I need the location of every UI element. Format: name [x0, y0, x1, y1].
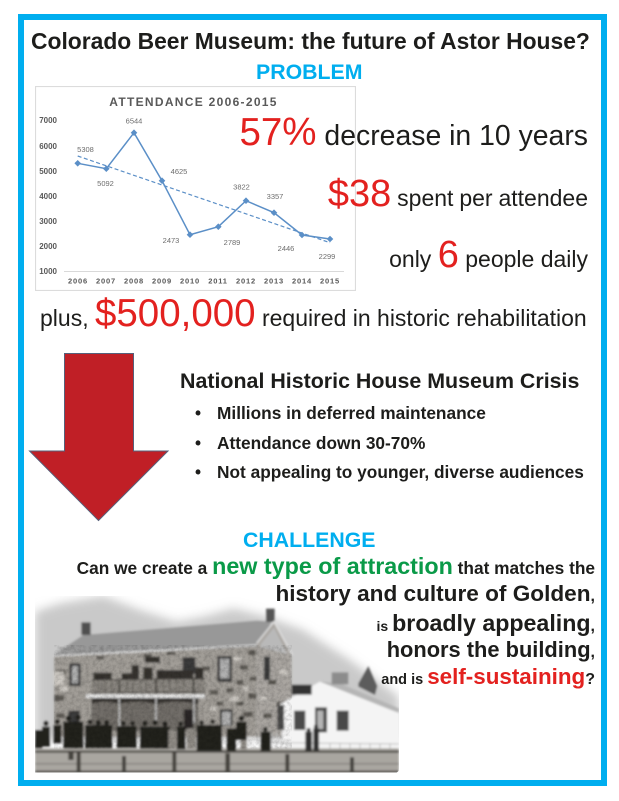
bullet 1: • [195, 403, 201, 423]
eaves [53, 645, 257, 656]
stat: $38 per attendee: $38 spent per attendee [328, 173, 588, 215]
x axis labels: 2008 [124, 276, 144, 286]
x axis labels: 2015 [320, 276, 340, 286]
y axis labels: 7000 [39, 116, 58, 125]
heading: problem: PROBLEM [256, 60, 362, 84]
x axis labels: 2012 [236, 276, 256, 286]
foreground rails and posts [35, 751, 399, 773]
line 2: history and culture of Golden, [275, 581, 595, 606]
heading: challenge: CHALLENGE [243, 528, 376, 552]
crowd [35, 715, 271, 751]
y axis labels: 4000 [39, 192, 58, 201]
line 1: Can we create a new type of attraction that matches the [77, 553, 595, 579]
windows [68, 656, 270, 726]
line 4: honors the building, [387, 637, 595, 662]
hills [35, 596, 399, 740]
data labels: 4625 [171, 167, 187, 176]
white cottage [280, 682, 399, 753]
trend line [78, 156, 330, 243]
x axis labels: 2011 [208, 276, 228, 286]
challenge question text [77, 553, 595, 689]
chimneys [81, 622, 91, 635]
bullet list: crisis points: Not appealing to younger, diverse audiences [217, 462, 584, 482]
cottage figures [305, 725, 319, 752]
bullet list: crisis points: Millions in deferred maintenance [217, 403, 486, 423]
y axis labels: 6000 [39, 142, 58, 151]
y axis labels [39, 116, 58, 276]
balcony railing [92, 679, 205, 693]
film grain on hotel [54, 645, 292, 748]
data labels: 3822 [233, 182, 250, 192]
line 5: and is self-sustaining? [381, 664, 595, 689]
y axis labels: 2000 [39, 242, 58, 251]
x axis line [64, 270, 344, 272]
hotel roof [53, 621, 272, 655]
data labels: 5092 [97, 179, 114, 188]
hotel facade [54, 647, 257, 737]
x axis labels [68, 276, 340, 286]
x axis labels: 2014 [292, 276, 312, 286]
bullet 3: • [195, 462, 201, 482]
bullet list: crisis points: Attendance down 30-70% [217, 433, 425, 453]
bullet 3 [195, 462, 584, 482]
bullet 2: • [195, 433, 201, 453]
balcony crowd [93, 657, 203, 681]
line chart: attendance 2006-2015 [35, 86, 356, 291]
x axis labels: 2013 [264, 276, 284, 286]
bullet 2 [195, 433, 425, 453]
x axis labels: 2006 [68, 276, 88, 286]
data labels: 2789 [224, 238, 240, 247]
y axis labels: 5000 [39, 167, 58, 176]
porch shade [92, 697, 198, 731]
stat: $500,000 rehabilitation: plus, $500,000 required in historic rehabilitation [40, 292, 587, 335]
y axis labels: 3000 [39, 217, 58, 226]
photo: historic Astor House [35, 596, 399, 772]
stone blocks [54, 650, 284, 718]
data labels: 2446 [278, 244, 294, 253]
street and foreground fence [35, 748, 399, 773]
heading: national crisis: National Historic House Museum Crisis [180, 369, 579, 393]
line 3: is broadly appealing, [377, 610, 595, 636]
y axis labels: 1000 [39, 267, 58, 276]
side wall and gable [257, 622, 292, 737]
picket fence [269, 734, 399, 748]
data labels [77, 116, 335, 261]
x axis labels: 2009 [152, 276, 172, 286]
data labels: 6544 [126, 116, 142, 126]
attendance series line [78, 133, 330, 239]
x axis labels: 2010 [180, 276, 200, 286]
stat: 57% decrease: 57% decrease in 10 years [239, 111, 588, 154]
stat: 6 people daily: only 6 people daily [389, 234, 588, 276]
data labels: 3357 [267, 192, 283, 201]
bullet list: crisis points [195, 403, 584, 482]
title: Colorado Beer Museum: the future of Astor House? [31, 28, 590, 54]
porch canopy [86, 694, 205, 698]
data point markers [74, 129, 333, 242]
data labels: 2299 [319, 252, 335, 261]
bullet 1 [195, 403, 486, 423]
icon: red down arrow [28, 353, 170, 522]
x axis labels: 2007 [96, 276, 116, 286]
data labels: 5308 [77, 145, 94, 154]
data labels: 2473 [163, 236, 179, 245]
chart title: ATTENDANCE 2006-2015 [109, 95, 278, 109]
